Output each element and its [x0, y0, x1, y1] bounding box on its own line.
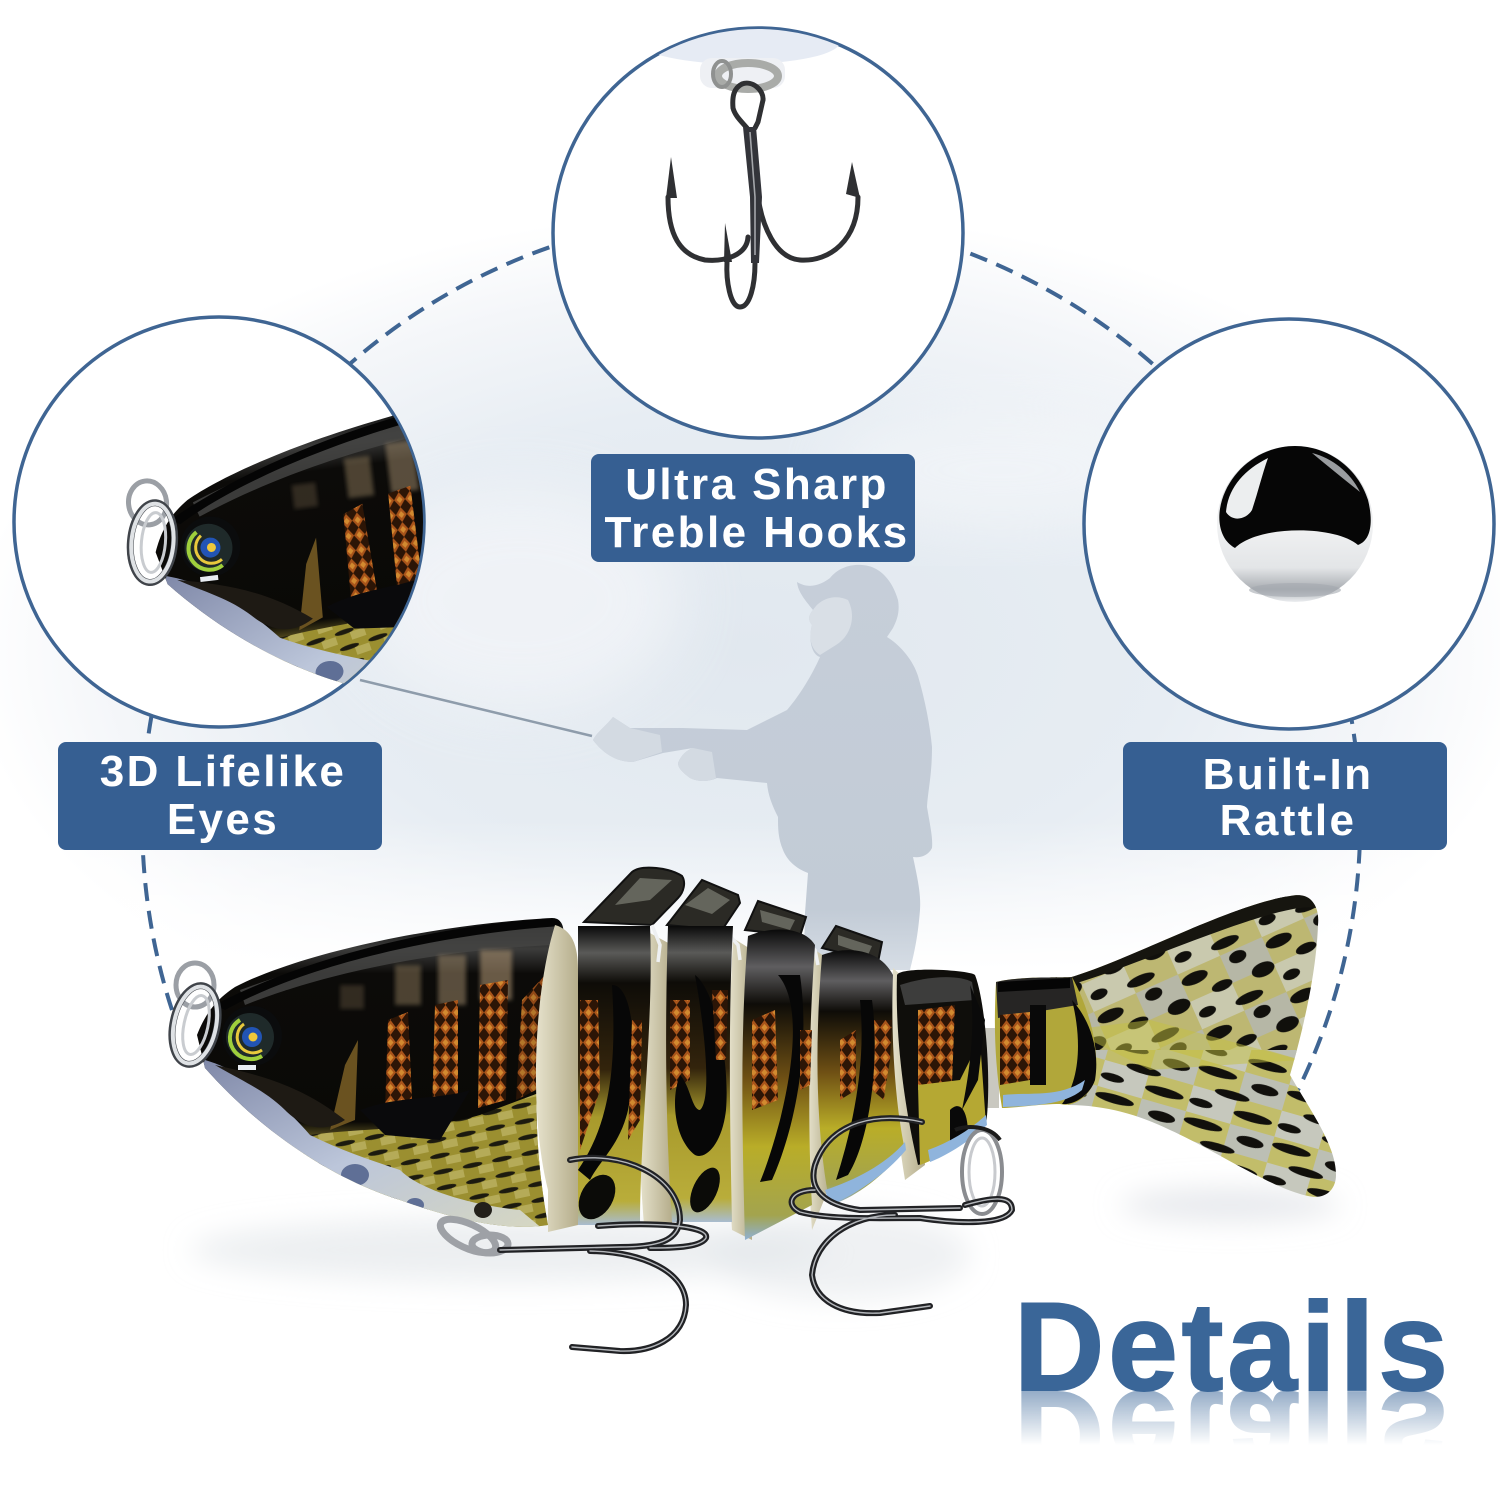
joint cream bands: [536, 925, 999, 1240]
dorsal fin highlights: [615, 878, 872, 955]
body segment 4: [742, 930, 815, 1240]
label: 3D Lifelike Eyes: [58, 742, 382, 850]
tail fin top edge: [1068, 895, 1316, 985]
label: Ultra Sharp Treble Hooks: Ultra Sharp: [625, 460, 889, 509]
fisherman silhouette: [360, 565, 932, 970]
label: Built-In Rattle: Built-In: [1203, 750, 1373, 799]
body segment 2: [571, 926, 651, 1226]
circle outline: [14, 317, 424, 727]
dorsal fin segments: [584, 868, 882, 962]
body segment 5: [817, 950, 906, 1205]
label: 3D Lifelike Eyes: 3D Lifelike: [100, 747, 346, 796]
lure head close-up: [126, 416, 423, 684]
tail segment: [995, 977, 1096, 1108]
circle outline: [1084, 319, 1494, 729]
fisherman figure: [593, 565, 932, 970]
dashed connector arc: [142, 213, 1360, 1090]
label: Ultra Sharp Treble Hooks: [591, 454, 915, 562]
circle outline: [553, 28, 963, 438]
panel: rattle detail circle: [1084, 319, 1494, 729]
label: Built-In Rattle: [1123, 742, 1447, 850]
panel: lifelike eye detail circle: [12, 315, 426, 729]
label: Ultra Sharp Treble Hooks: Treble Hooks: [604, 508, 910, 557]
rear split ring: [955, 1127, 1002, 1214]
lure ground shadows: [190, 1189, 1340, 1300]
panel: treble hook detail circle: [553, 20, 963, 438]
title text: Details: [1014, 1278, 1452, 1417]
label: 3D Lifelike Eyes: Eyes: [167, 795, 279, 844]
title: Details with reflection: [1021, 1298, 1444, 1441]
jointed swimbait lure: [165, 868, 1340, 1351]
fisherman face: [809, 597, 852, 655]
lure head: [165, 918, 564, 1235]
body segment 3: [666, 926, 733, 1222]
front treble hook: [436, 1158, 706, 1351]
icon: treble hook: [658, 29, 860, 310]
silver fin joints: [652, 925, 892, 975]
body segment 6: [897, 970, 988, 1165]
tail fin: [1068, 895, 1336, 1197]
fishing rod: [360, 680, 592, 736]
label: Built-In Rattle: Rattle: [1220, 796, 1356, 845]
title reflection: Details: [1014, 1365, 1452, 1500]
rear treble hook: [792, 1118, 1012, 1313]
icon: steel ball: [1217, 446, 1373, 602]
fisherman hands: [593, 717, 716, 781]
